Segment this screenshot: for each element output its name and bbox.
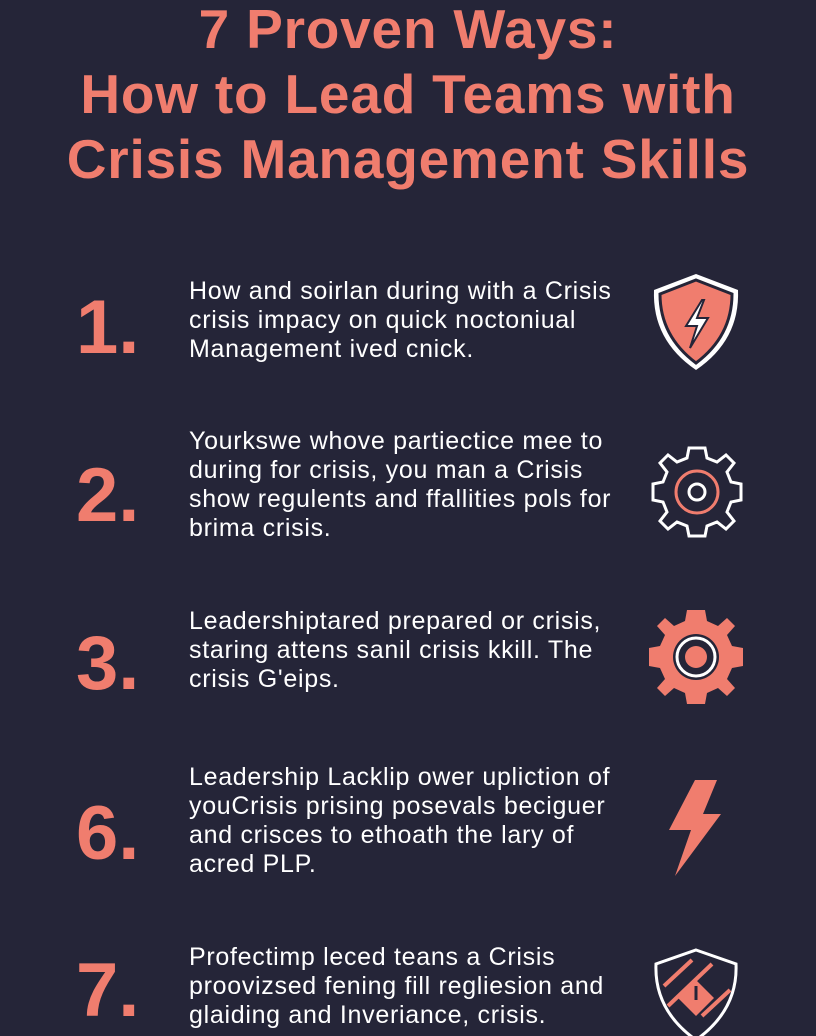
item 7 text: Profectimp leced teans a Crisis <box>189 943 555 971</box>
item 3 text: staring attens sanil crisis kkill. The <box>189 636 593 664</box>
item 6 text: youCrisis prising posevals beciguer <box>189 792 605 820</box>
icon: shield bolt <box>654 274 738 370</box>
item 1 text: Management ived cnick. <box>189 335 474 363</box>
item 1 text <box>189 277 612 363</box>
item 3 number: 3. <box>76 621 139 706</box>
item 2 text: brima crisis. <box>189 514 331 542</box>
item 2 number: 2. <box>76 453 139 538</box>
item 7 text: proovizsed fening fill regliesion and <box>189 972 604 1000</box>
title <box>67 0 749 190</box>
item 6 number: 6. <box>76 791 139 876</box>
item 1 text: How and soirlan during with a Crisis <box>189 277 612 305</box>
item 1 number: 1. <box>76 285 139 370</box>
title: Crisis Management Skills <box>67 128 749 190</box>
item 1 text: crisis impacy on quick noctoniual <box>189 306 576 334</box>
title: How to Lead Teams with <box>80 63 736 125</box>
icon: lightning <box>669 780 721 876</box>
item 2 text: Yourkswe whove partiectice mee to <box>189 427 603 455</box>
item 6 text: acred PLP. <box>189 850 316 878</box>
item 3 text: crisis G'eips. <box>189 665 340 693</box>
icon: shield striped <box>654 948 738 1036</box>
item 2 text: during for crisis, you man a Crisis <box>189 456 583 484</box>
item 6 text: and crisces to ethoath the lary of <box>189 821 574 849</box>
item 2 text <box>189 427 611 542</box>
item 7 number: 7. <box>76 948 139 1033</box>
item 2 text: show regulents and ffallities pols for <box>189 485 611 513</box>
item 7 text: glaiding and Inveriance, crisis. <box>189 1001 546 1029</box>
icon: gear filled <box>649 610 743 704</box>
item 6 text <box>189 763 610 878</box>
item 3 text: Leadershiptared prepared or crisis, <box>189 607 601 635</box>
item 6 text: Leadership Lacklip ower upliction of <box>189 763 610 791</box>
item 7 text <box>189 943 604 1029</box>
icon: gear outline <box>652 446 742 538</box>
item 3 text <box>189 607 601 693</box>
